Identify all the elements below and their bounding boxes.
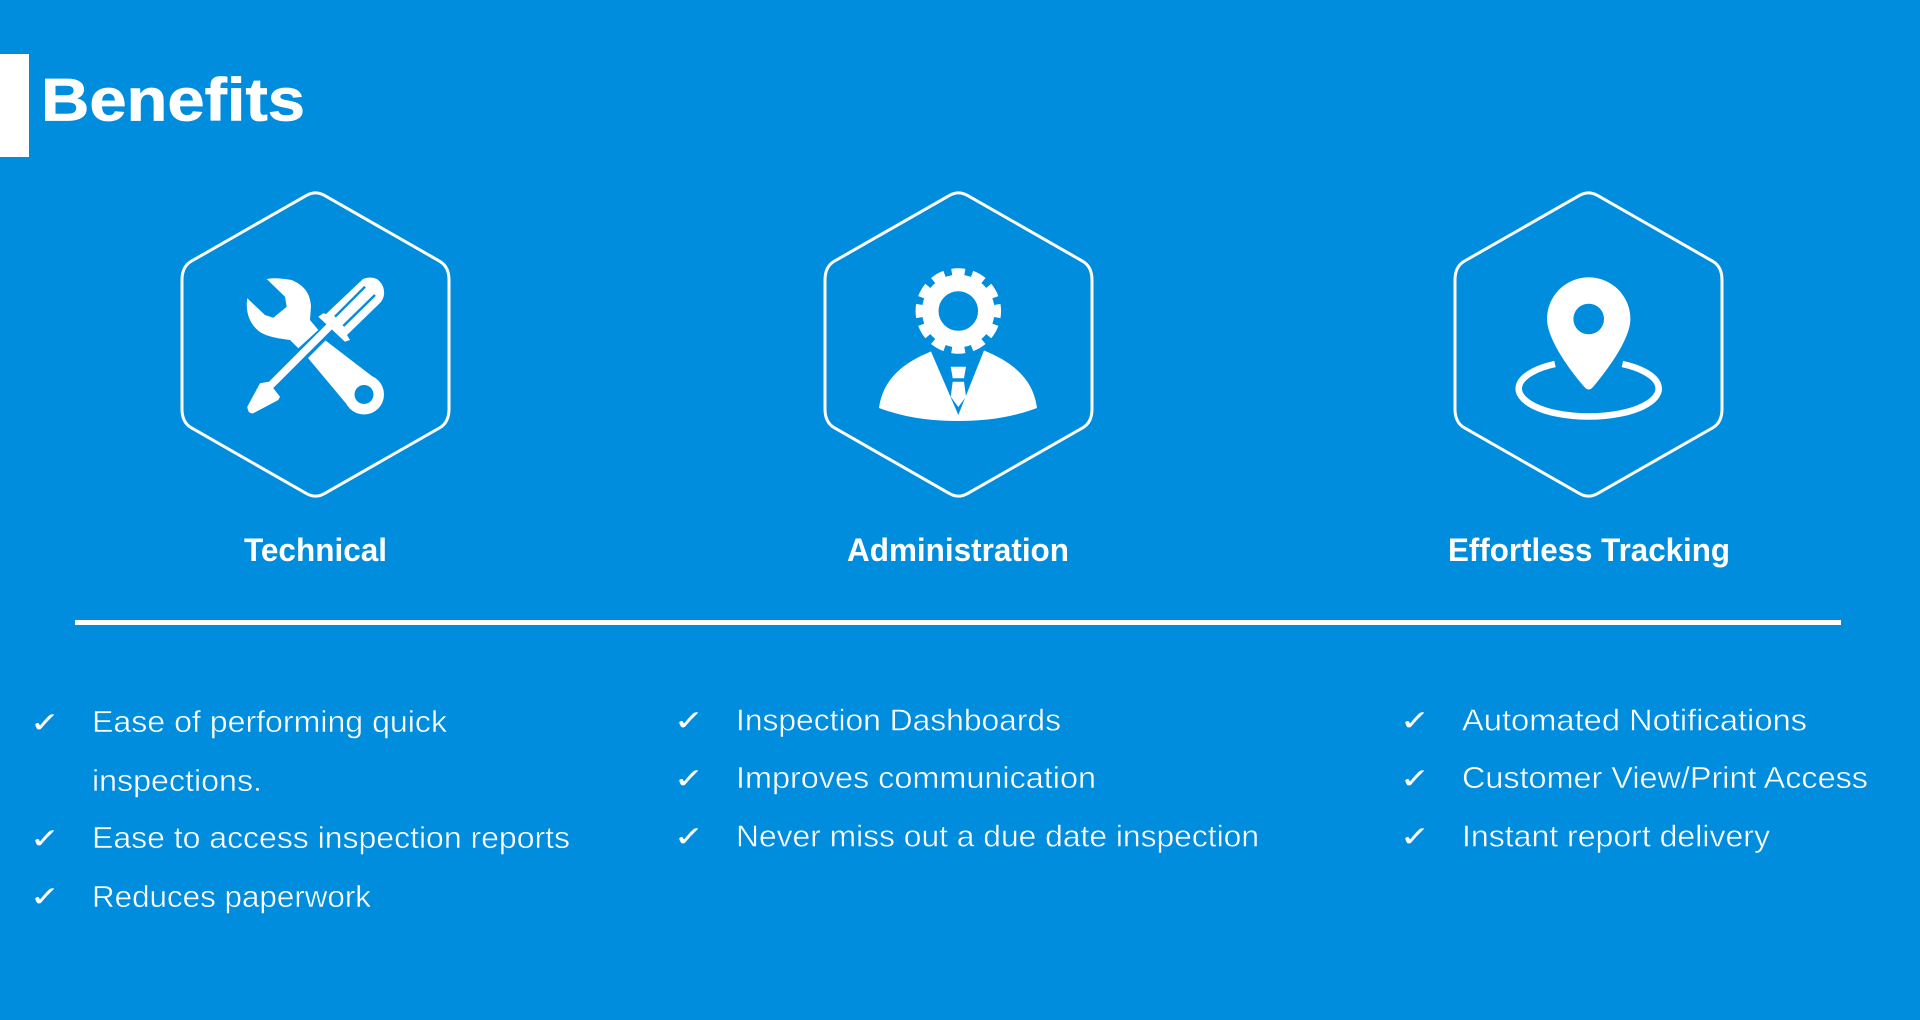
heading: technical: Technical — [244, 532, 387, 568]
list: tracking benefits: ✓ — [1400, 762, 1430, 795]
hexagon frame — [182, 193, 449, 496]
list: administration benefits: Inspection Dashboards — [736, 702, 1061, 738]
heading: effortless tracking: Effortless Tracking — [1448, 532, 1730, 568]
list: tracking benefits: Customer View/Print Access — [1462, 760, 1868, 795]
panel: administration — [825, 193, 1092, 568]
title accent bar — [0, 54, 29, 157]
list: tracking benefits: Automated Notifications — [1462, 702, 1807, 738]
list: tracking benefits — [1400, 702, 1868, 854]
list: administration benefits: ✓ — [674, 704, 704, 737]
icon: person with gear head — [879, 273, 1037, 421]
hexagon frame — [1455, 193, 1722, 496]
divider line — [75, 620, 1841, 625]
list: technical benefits: ✓ — [30, 822, 60, 855]
hexagon frame — [825, 193, 1092, 496]
panel: technical — [182, 193, 449, 568]
list: administration benefits: ✓ — [674, 820, 704, 853]
list: technical benefits: Reduces paperwork — [92, 879, 372, 914]
list: technical benefits: ✓ — [30, 706, 60, 739]
list: administration benefits: ✓ — [674, 762, 704, 795]
list: tracking benefits: Instant report delivery — [1462, 818, 1771, 854]
list: technical benefits: Ease of performing quick — [92, 704, 448, 739]
icon: wrench and screwdriver — [247, 278, 384, 414]
title: Benefits — [41, 66, 305, 134]
panel: effortless tracking — [1448, 193, 1730, 568]
list: tracking benefits: ✓ — [1400, 820, 1430, 853]
list: technical benefits: inspections. — [92, 763, 262, 798]
list: tracking benefits: ✓ — [1400, 704, 1430, 737]
list: technical benefits: ✓ — [30, 880, 60, 913]
list: administration benefits: Improves communication — [736, 760, 1096, 795]
heading: administration: Administration — [847, 532, 1069, 568]
icon: location pin — [1519, 277, 1659, 417]
list: administration benefits: Never miss out a due date inspection — [736, 818, 1259, 854]
list: technical benefits: Ease to access inspection reports — [92, 820, 570, 855]
list: administration benefits — [674, 702, 1259, 854]
list: technical benefits — [30, 704, 570, 914]
